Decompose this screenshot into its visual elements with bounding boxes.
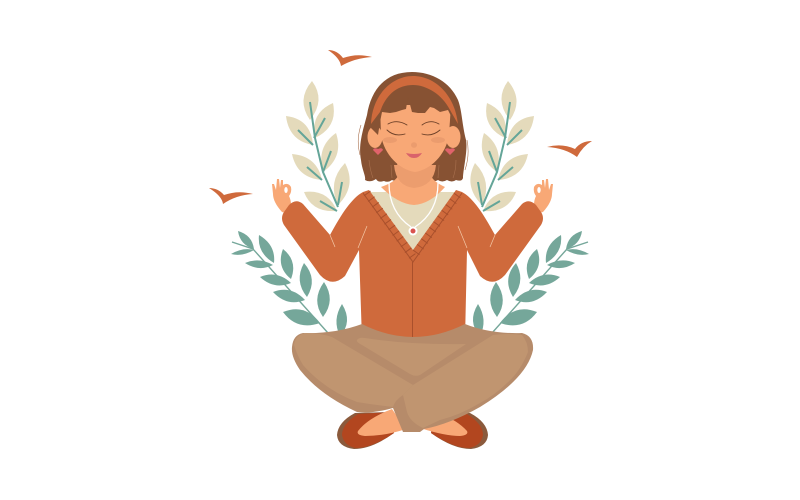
plant: lower right teal branch bbox=[473, 231, 589, 336]
ear: right bbox=[446, 126, 460, 148]
face bbox=[380, 105, 451, 172]
left thigh bbox=[294, 333, 413, 407]
right thigh bbox=[403, 334, 528, 428]
foot: right bbox=[420, 414, 467, 436]
necklace bbox=[389, 183, 438, 236]
nose bbox=[411, 142, 417, 148]
bird: left bbox=[209, 188, 253, 204]
mouth bbox=[406, 153, 422, 158]
plant: upper left cream branch bbox=[286, 81, 350, 211]
eyes and brows bbox=[387, 122, 440, 135]
cardigan bbox=[282, 190, 543, 342]
headband bbox=[371, 76, 458, 124]
plant: upper right cream branch bbox=[470, 81, 534, 211]
cheeks bbox=[383, 137, 445, 143]
bird: right bbox=[547, 141, 592, 157]
hair: back bbox=[358, 72, 468, 182]
earrings bbox=[373, 148, 455, 155]
cardigan center placket bbox=[412, 262, 414, 338]
foot: left bbox=[358, 409, 406, 436]
shoe: right bbox=[420, 412, 488, 449]
ear: left bbox=[368, 126, 382, 148]
hair strands bbox=[358, 125, 468, 178]
shoe: left bbox=[337, 409, 406, 449]
lap panel bbox=[357, 338, 466, 376]
bangs bbox=[371, 80, 457, 135]
trousers bbox=[292, 324, 533, 432]
hand: right bbox=[534, 179, 553, 213]
neck and chest bbox=[370, 160, 457, 252]
sleeve creases bbox=[330, 226, 495, 248]
plant: lower left teal branch bbox=[231, 231, 347, 336]
cardigan collar ribbing bbox=[363, 193, 462, 262]
hand: left bbox=[272, 179, 291, 213]
bird: top bbox=[328, 50, 372, 66]
head bbox=[368, 76, 460, 172]
